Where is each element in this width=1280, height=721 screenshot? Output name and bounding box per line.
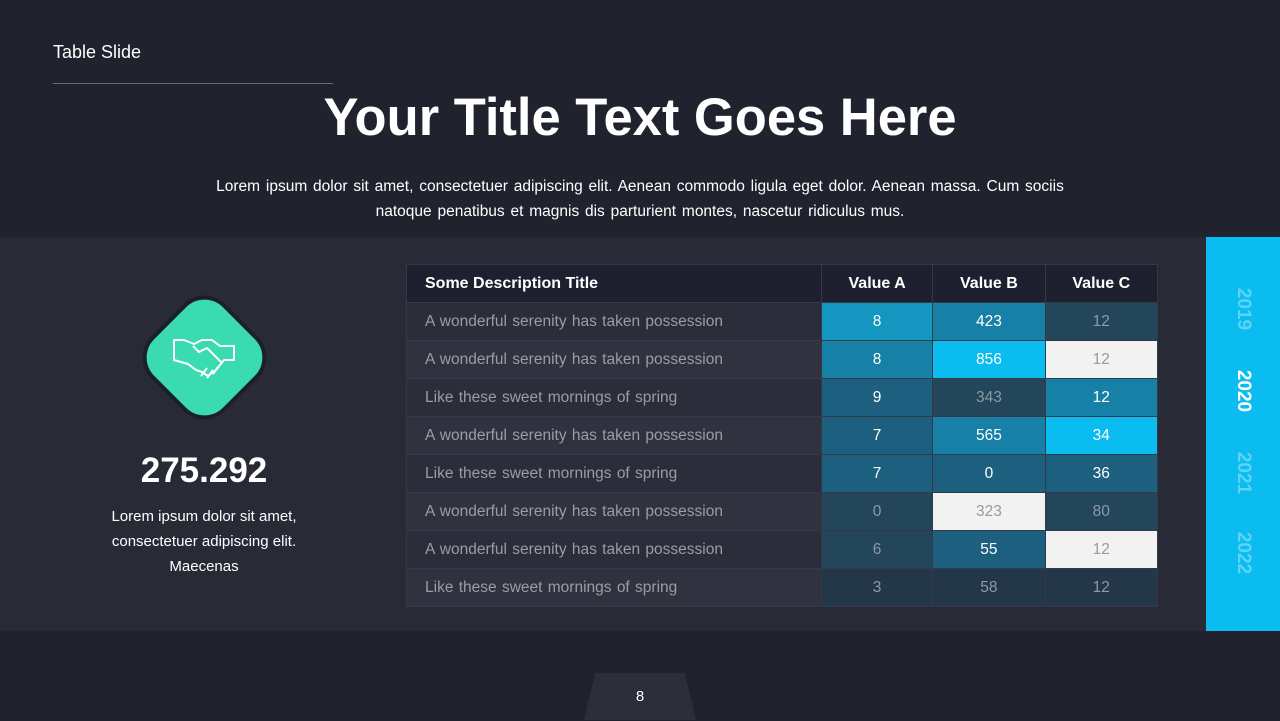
page number tab: 8 — [636, 688, 644, 705]
table: Like these sweet mornings of spring — [425, 464, 677, 482]
table: 8 — [873, 350, 881, 368]
stat value: 275.292 — [141, 451, 267, 490]
table: 565 — [976, 426, 1002, 444]
icon: handshake — [142, 296, 266, 420]
table: A wonderful serenity has taken possession — [425, 540, 723, 558]
table: 423 — [976, 312, 1002, 330]
sidebar: years — [1206, 237, 1280, 631]
table: 7 — [873, 426, 881, 444]
table: A wonderful serenity has taken possession — [425, 426, 723, 444]
table: 55 — [980, 540, 998, 558]
table: 856 — [976, 350, 1002, 368]
table: 80 — [1093, 502, 1110, 520]
subtitle text: Lorem ipsum dolor sit amet, consectetuer adipiscing elit. Aenean commodo ligula eget dolor. Aenean massa. Cum sociis natoque penatibus et magnis dis parturient montes, nascetur ridiculus mus. — [216, 178, 1064, 220]
table: 34 — [1093, 426, 1110, 444]
table: A wonderful serenity has taken possession — [425, 312, 723, 330]
table — [406, 264, 1158, 607]
title: Your Title Text Goes Here — [323, 88, 957, 147]
table: 3 — [873, 578, 881, 596]
table: Value B — [960, 274, 1018, 292]
label: Table Slide: Table Slide — [53, 42, 141, 62]
table: A wonderful serenity has taken possession — [425, 502, 723, 520]
sidebar: years: 2021 — [1233, 452, 1254, 494]
panel: content band — [0, 237, 1206, 631]
table: Some Description Title — [425, 274, 598, 292]
table: 12 — [1093, 388, 1110, 406]
table: Like these sweet mornings of spring — [425, 388, 677, 406]
table: 0 — [873, 502, 881, 520]
sidebar: years: 2019 — [1233, 288, 1254, 330]
table: Value C — [1072, 274, 1130, 292]
table: 343 — [976, 388, 1002, 406]
table: 58 — [980, 578, 998, 596]
table: Value A — [848, 274, 906, 292]
table: A wonderful serenity has taken possession — [425, 350, 723, 368]
table: 7 — [873, 464, 881, 482]
table: 0 — [985, 464, 993, 482]
table: 323 — [976, 502, 1002, 520]
table: 12 — [1093, 312, 1110, 330]
table: 8 — [873, 312, 881, 330]
table: 9 — [873, 388, 881, 406]
table: 12 — [1093, 540, 1110, 558]
sidebar: years: 2022 — [1233, 532, 1254, 574]
table: 36 — [1093, 464, 1110, 482]
page number tab — [584, 673, 696, 720]
table: Like these sweet mornings of spring — [425, 578, 677, 596]
sidebar: years: 2020 — [1233, 370, 1254, 412]
table: 6 — [873, 540, 881, 558]
table: 12 — [1093, 350, 1110, 368]
stat description: Lorem ipsum dolor sit amet, consectetuer adipiscing elit. Maecenas — [111, 508, 297, 575]
table: 12 — [1093, 578, 1110, 596]
